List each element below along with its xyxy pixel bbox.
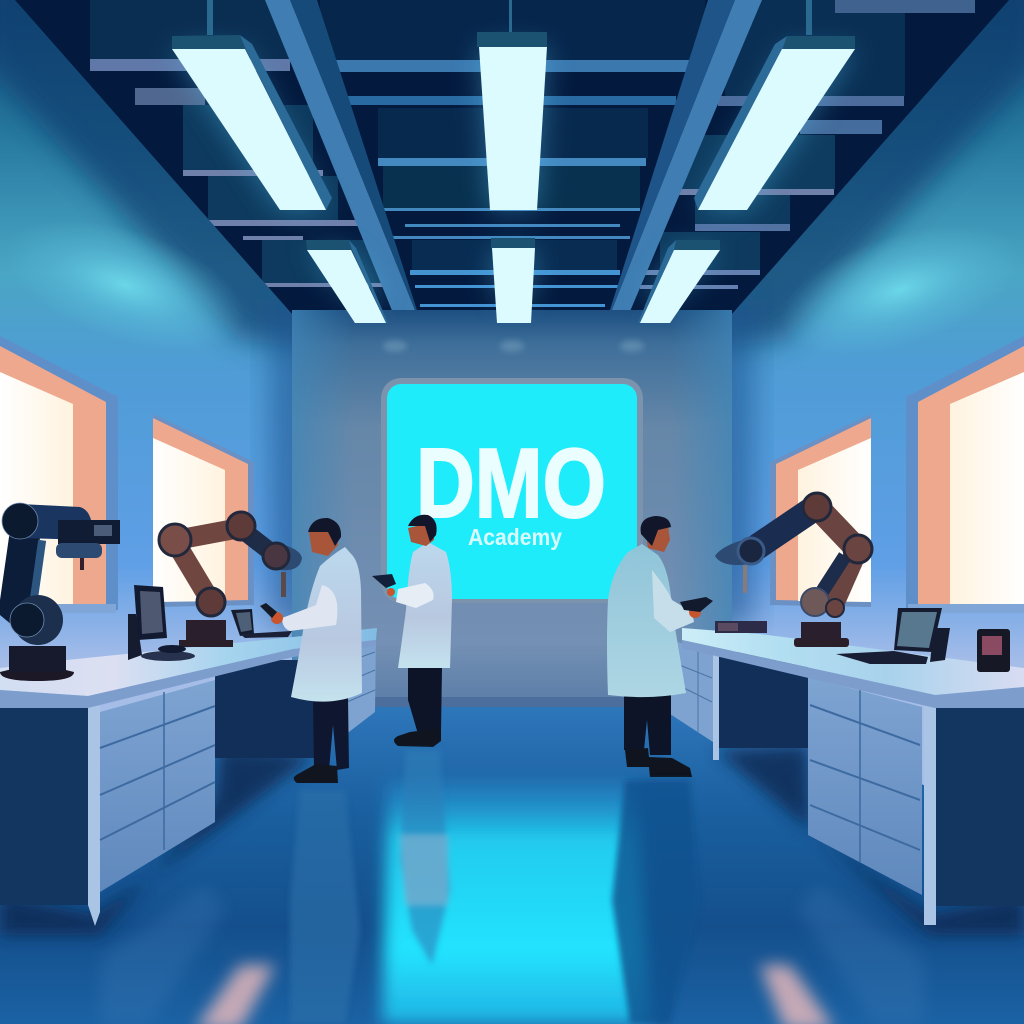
windows left [0,336,254,613]
light: rear right [638,240,720,323]
light: rear center [491,238,535,323]
ceiling lights [172,0,855,323]
legs [624,692,671,755]
robot arm: far left [0,503,120,681]
floor wall base [292,697,732,707]
scientist: left [260,518,362,783]
light: rear left [306,240,388,323]
window: far left [0,336,118,613]
bench: rear left drawers [345,636,376,735]
floor reflection of screen [382,780,650,1024]
window: far right [906,336,1024,613]
floor bench reflection right [798,885,924,1024]
legs [394,668,442,747]
bench: left [0,628,377,926]
screen text: DMO: DMO [416,428,606,538]
light: front right [694,36,855,210]
screen [381,378,643,603]
legs [294,698,349,783]
screen text: Academy: Academy [468,524,562,550]
coat [398,542,452,668]
sleeve [282,585,337,631]
sleeve [652,570,694,632]
tablet [372,574,396,596]
ceiling [0,0,1024,340]
light: front left [172,35,332,210]
laptop right [836,608,950,664]
floor side reflection right [760,965,835,1024]
laptop left [231,609,292,638]
robot arm: second left [159,512,302,647]
coat [291,547,362,702]
scientist: right [607,516,713,777]
windows right [770,336,1024,613]
head [408,515,437,546]
hand [260,603,283,624]
window: second left [153,414,254,607]
wall glow left [0,194,261,376]
sleeve [396,583,434,608]
wall glow right [764,199,1024,381]
floor side reflection left [195,965,275,1024]
floor bench reflection left [100,885,225,1024]
light: front center [477,32,547,210]
floor shadow under right bench [715,745,1024,935]
floor shadow under left bench [0,745,315,935]
head [641,516,671,552]
coat [607,544,686,697]
floor [0,700,1024,1024]
ceiling light glow [172,47,855,300]
robot arm: right [715,493,872,647]
hand and device [680,597,713,618]
head [308,518,341,556]
right wall [732,0,1024,786]
scientist: center [372,515,452,747]
device on right bench [715,621,767,633]
shoes [625,748,692,777]
monitor left [128,585,195,661]
floor reflections of scientists [290,750,700,1024]
bench: right [682,628,1024,925]
back wall [292,310,732,702]
bench: rear right drawers [670,640,808,760]
left wall [0,0,292,712]
window: second right [770,414,871,607]
handheld device on right bench [977,629,1010,672]
